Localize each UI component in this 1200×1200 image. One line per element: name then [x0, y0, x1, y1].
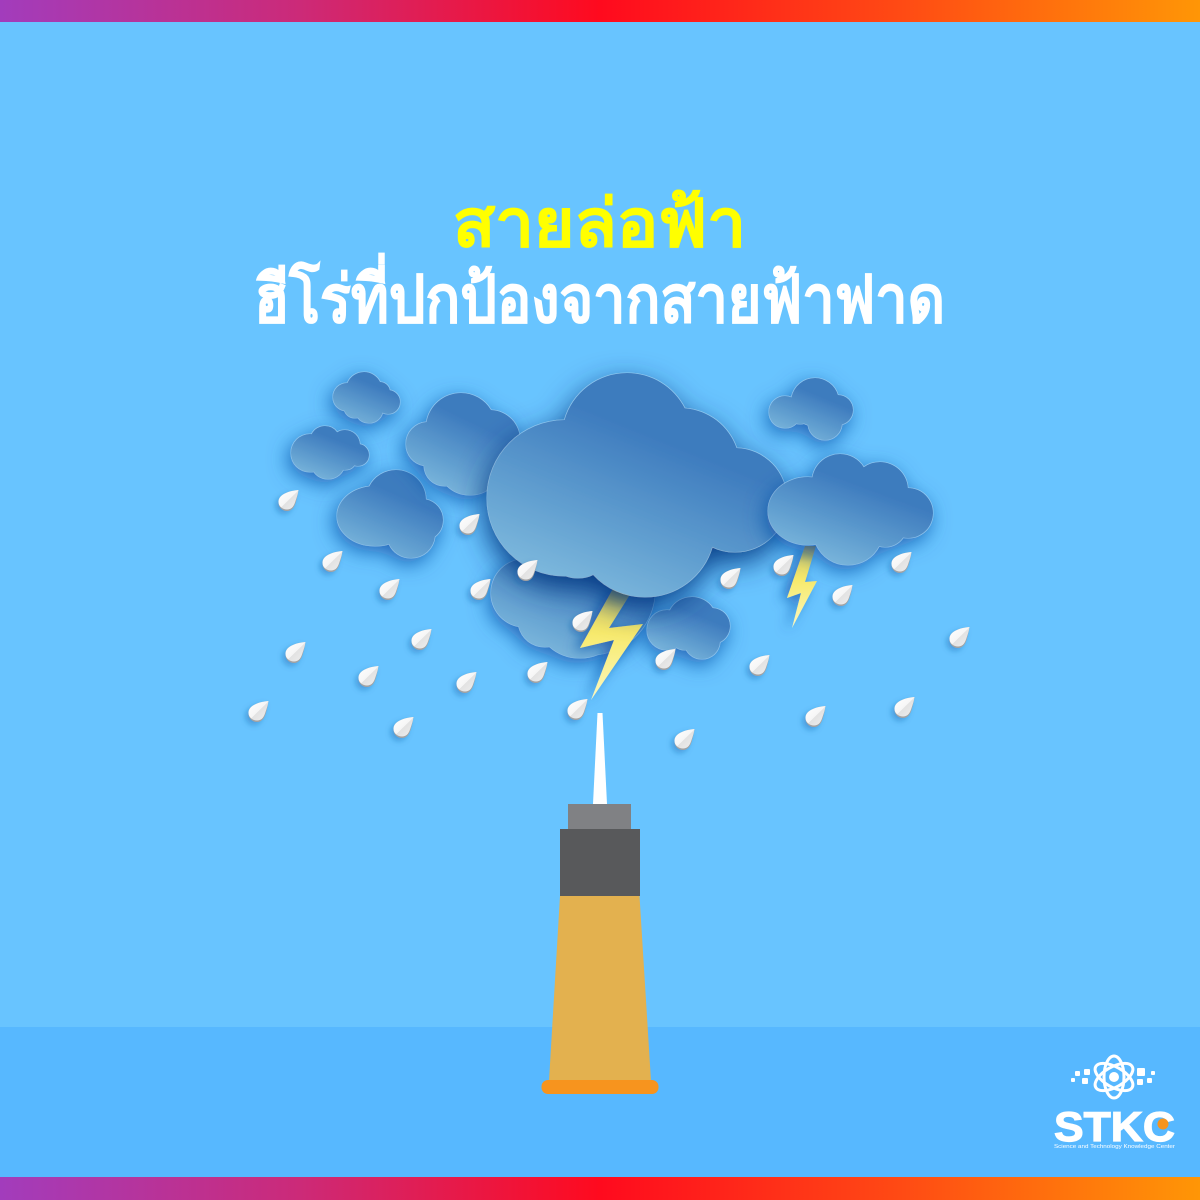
- raindrops: [248, 490, 970, 750]
- cloud: medium left: [330, 465, 450, 565]
- tower body: [549, 896, 651, 1081]
- title: [254, 186, 945, 336]
- tower base: [542, 1080, 658, 1094]
- logo: STKC: [1054, 1056, 1175, 1150]
- rod cap: [568, 804, 631, 829]
- ground band: [0, 1027, 1200, 1177]
- cloud: small upper right: [765, 374, 857, 444]
- title line 2: ฮีโร่ที่ปกป้องจากสายฟ้าฟาด: [254, 252, 945, 336]
- cloud: lower behind lightning: [476, 560, 660, 676]
- bottom gradient bar: [0, 1177, 1200, 1200]
- lightning bolt: small: [787, 546, 817, 628]
- logo tagline: Science and Technology Knowledge Center: [1054, 1144, 1175, 1150]
- top gradient bar: [0, 0, 1200, 22]
- logo orange dot: [1158, 1118, 1168, 1130]
- cloud: right: [762, 450, 938, 570]
- storm clouds and lightning: [285, 365, 938, 700]
- cloud: small upper left: [325, 365, 410, 430]
- rod collar: [560, 829, 640, 896]
- logo side dots: [1071, 1068, 1155, 1085]
- cloud: small lower right: [643, 593, 735, 663]
- rod spike: [593, 713, 607, 804]
- title line 1: สายล่อฟ้า: [453, 186, 746, 260]
- lightning rod tower: [542, 713, 658, 1094]
- cloud: main large: [480, 368, 795, 603]
- cloud: small left: [285, 420, 375, 485]
- logo atom icon: [1091, 1056, 1137, 1098]
- logo wordmark: STKC: [1054, 1103, 1175, 1150]
- cloud: back upper left: [400, 388, 525, 500]
- lightning bolt: large: [580, 585, 643, 700]
